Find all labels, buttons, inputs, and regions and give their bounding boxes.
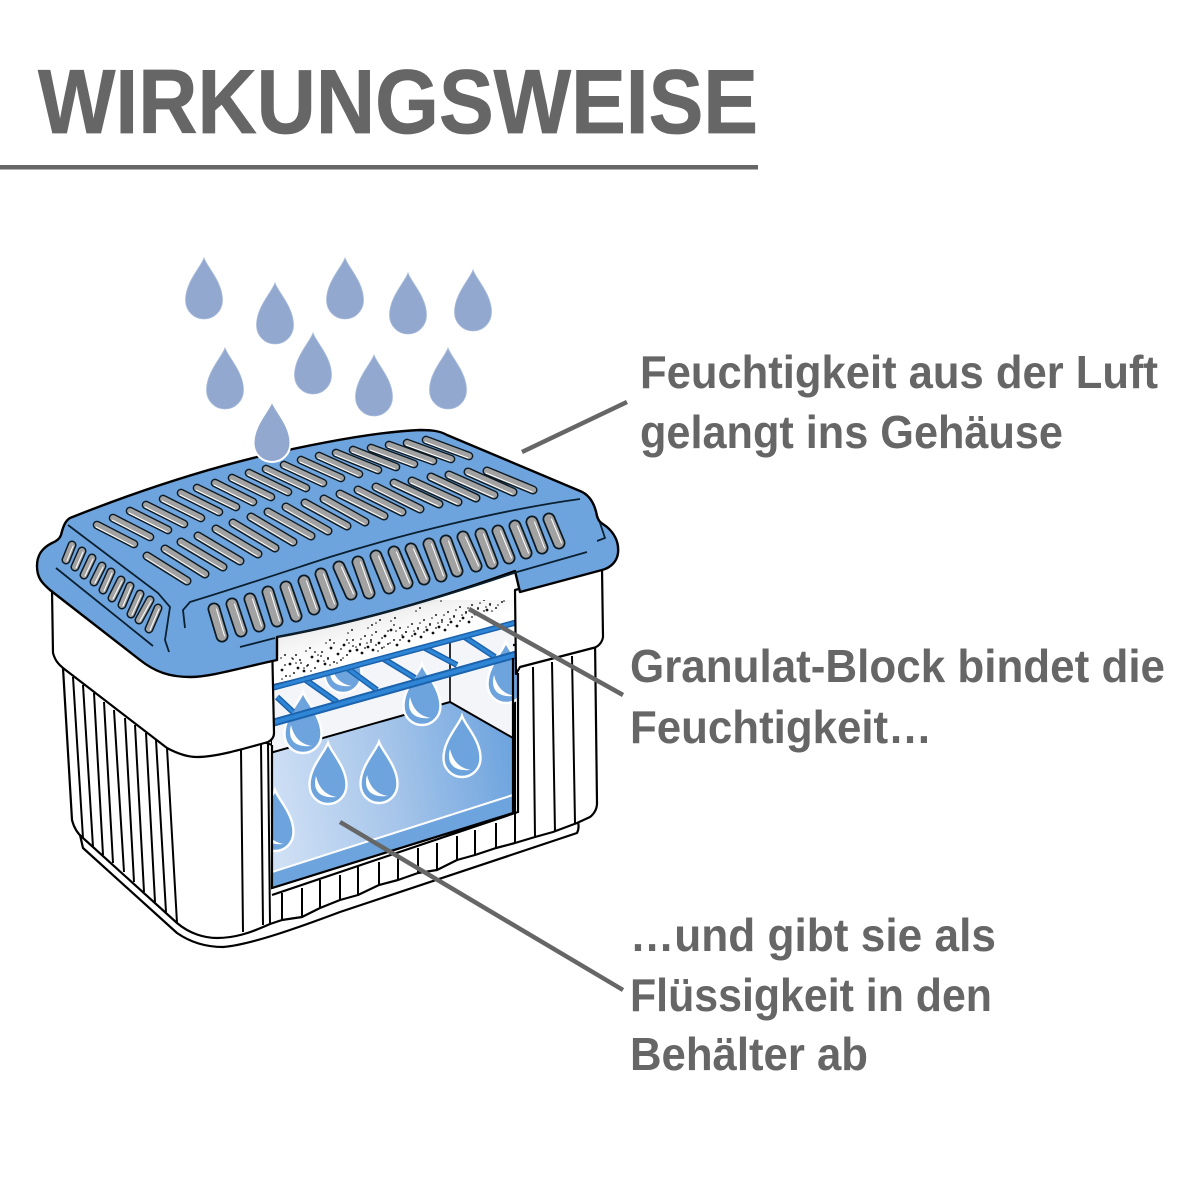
drop landing on lid	[254, 401, 290, 462]
lid vent slots	[66, 440, 562, 636]
window frame	[272, 658, 518, 895]
granulate block	[274, 600, 514, 684]
label: granulate block: Granulat-Block bindet die	[630, 640, 1165, 692]
callout line: liquid	[340, 822, 623, 990]
label: moisture from the air	[640, 346, 1158, 458]
label: releases as liquid: Flüssigkeit in den	[630, 969, 992, 1021]
cutaway window	[272, 600, 518, 889]
container body with ribs	[63, 640, 597, 938]
back wall	[272, 626, 513, 820]
label: granulate block	[630, 640, 1165, 753]
callout line: air moisture	[522, 402, 627, 452]
dehumidifier product illustration	[37, 430, 618, 947]
blue rack	[272, 622, 518, 723]
callout line: granulate	[469, 609, 623, 695]
upper white panel right	[515, 568, 603, 674]
upper white panel left	[52, 590, 274, 757]
title: WIRKUNGSWEISE	[38, 52, 758, 153]
label: moisture from the air: gelangt ins Gehäuse	[640, 406, 1063, 458]
title underline	[0, 165, 758, 170]
liquid reservoir	[270, 702, 513, 888]
blue lid	[37, 430, 618, 677]
label: granulate block: Feuchtigkeit…	[630, 701, 932, 753]
falling water drops	[186, 258, 492, 416]
label: moisture from the air: Feuchtigkeit aus der Luft	[640, 346, 1158, 398]
drops inside container	[273, 640, 518, 852]
label: releases as liquid: …und gibt sie als	[630, 909, 996, 961]
granulate speckles	[280, 600, 505, 680]
label: releases as liquid: Behälter ab	[630, 1028, 868, 1080]
container base	[80, 822, 579, 947]
label: releases as liquid	[630, 909, 996, 1080]
